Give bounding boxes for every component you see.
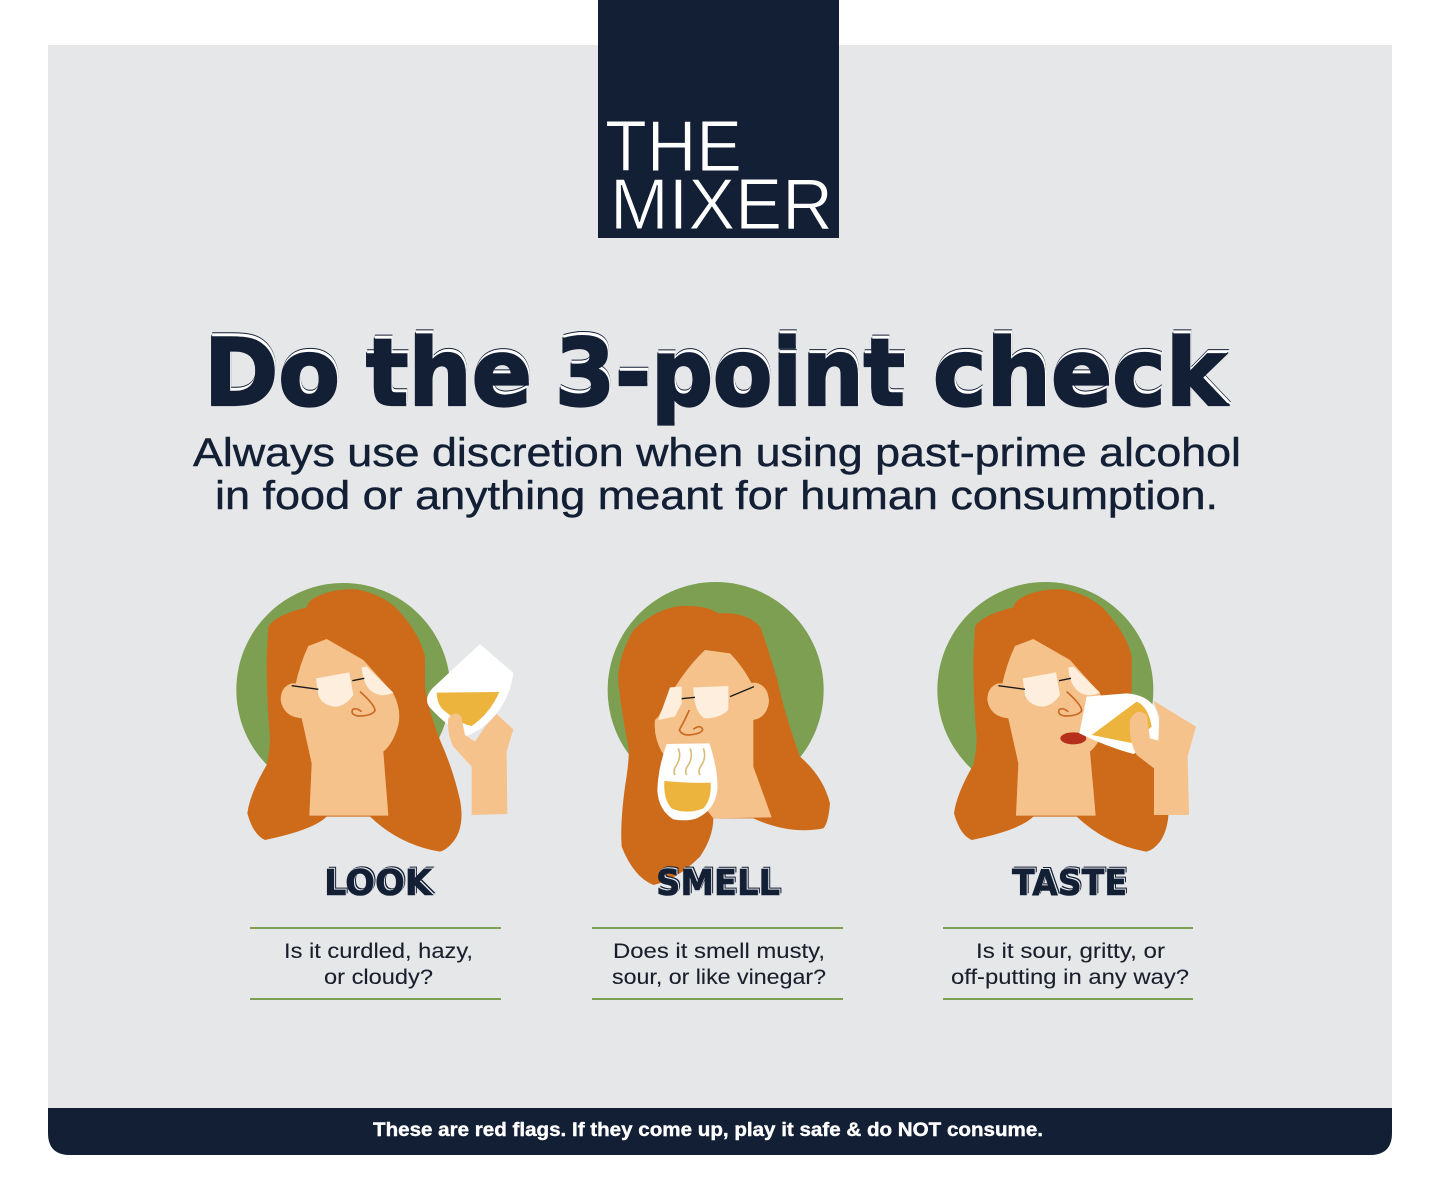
ear	[747, 683, 769, 720]
logo: The Mixer	[598, 0, 839, 245]
ear	[987, 683, 1012, 718]
subtitle: Always use discretion when using past-prime alcohol	[193, 431, 1241, 475]
hand	[1130, 701, 1196, 815]
text block: taste: Is it sour, gritty, or	[976, 940, 1165, 963]
logo: The Mixer: MIXER	[610, 165, 833, 245]
label: look: LOOK	[324, 863, 433, 904]
logo: The Mixer: THE	[605, 107, 742, 187]
illustration: smell	[608, 582, 830, 885]
subtitle: in food or anything meant for human consumption.	[215, 474, 1218, 518]
hair	[618, 606, 830, 885]
footer banner: These are red flags. If they come up, play it safe & do NOT consume.	[373, 1120, 1043, 1141]
illustration: taste	[937, 582, 1196, 852]
illustration: look	[236, 583, 513, 852]
glasses	[998, 667, 1100, 707]
steam	[674, 748, 705, 775]
glass	[657, 743, 717, 820]
footer banner	[48, 1108, 1392, 1155]
hair	[954, 589, 1169, 852]
wine	[437, 692, 499, 726]
text block: look: Is it curdled, hazy,	[284, 940, 473, 963]
title: check	[933, 319, 1228, 427]
hand	[448, 713, 513, 815]
nose	[679, 710, 703, 735]
glasses	[292, 667, 393, 707]
face	[1002, 639, 1106, 816]
nose	[352, 692, 375, 716]
label: smell: SMELL	[656, 863, 780, 904]
mouth	[1060, 732, 1086, 744]
text block: taste	[943, 927, 1193, 1000]
nose	[1059, 692, 1082, 716]
text block: smell: Does it smell musty,	[613, 940, 825, 963]
wine glass	[428, 645, 513, 736]
label: taste: TASTE	[1012, 863, 1127, 904]
text block: look: or cloudy?	[324, 966, 433, 989]
face	[295, 639, 399, 816]
title	[204, 319, 1228, 427]
liquid	[664, 781, 711, 812]
text block: look	[250, 927, 501, 1000]
title: 3-point	[555, 319, 905, 427]
subtitle	[193, 431, 1241, 518]
face	[655, 650, 772, 818]
hair	[247, 589, 461, 852]
glasses	[658, 686, 754, 720]
text block: smell	[592, 927, 843, 1000]
ear	[281, 683, 305, 718]
glass	[1079, 693, 1161, 754]
title: Do	[204, 319, 340, 427]
text block: taste: off-putting in any way?	[951, 966, 1189, 989]
text block: smell: sour, or like vinegar?	[612, 966, 826, 989]
title: the	[366, 319, 532, 427]
liquid	[1092, 702, 1152, 743]
